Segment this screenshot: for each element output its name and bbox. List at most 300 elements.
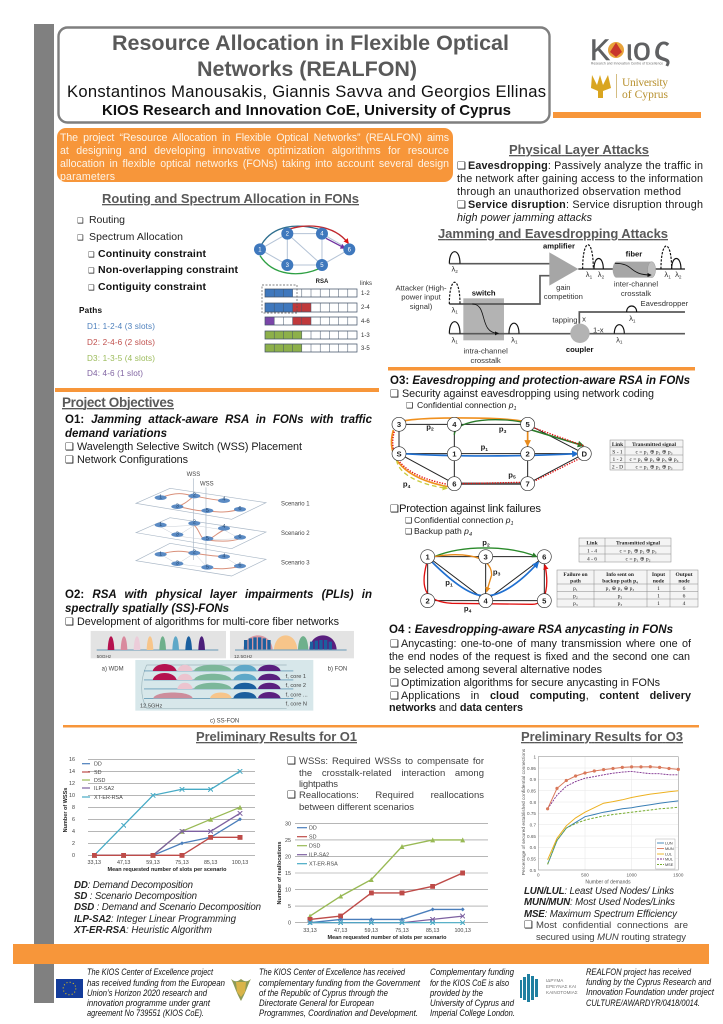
- line chart: percentage of secured connections: 0: [537, 872, 540, 878]
- diagram: jamming and eavesdropping: 1-x: [593, 326, 604, 335]
- legend text: O1 algorithms: [73, 880, 261, 936]
- orange rule: left column top: [55, 388, 379, 392]
- footer text: Government funding: of the Republic of Cyprus through the: [259, 988, 388, 998]
- text: WSS and reallocations: ❑: [287, 756, 296, 767]
- list: routing and spectrum constraints: Contiguity constraint: [98, 281, 206, 293]
- footer text: University funding: Imperial College London.: [430, 1008, 515, 1018]
- slot grid: RSA allocation: 1-3: [361, 333, 370, 339]
- intro callout: The project “Resource Allocation in Flexible Optical Networks” (REALFON) aims: [60, 132, 449, 144]
- diagram: WDM FON SS-FON spectra: 50GHz: [97, 654, 112, 659]
- footer text: University funding: Complementary funding: [430, 967, 514, 977]
- protection text: 4: [469, 532, 472, 538]
- protection text: [390, 503, 541, 538]
- line chart: number of reallocations: 30: [285, 821, 291, 827]
- logo: KOIOS: ι: [626, 34, 633, 67]
- logo: Research and Innovation Foundation: ΙΔΡΥΜΑ: [546, 978, 564, 983]
- line chart: number of reallocations: 85,13: [426, 928, 439, 934]
- diagram: WSS scenarios: 2: [193, 520, 196, 526]
- line chart: percentage of secured connections: 0.95: [527, 766, 536, 771]
- footer text: Government funding: complementary funding from the Government: [259, 978, 421, 988]
- table: failures on paths: 4: [683, 601, 686, 607]
- diagram: WSS scenarios: 5: [206, 536, 209, 542]
- title box: Networks (REALFON): [197, 57, 417, 81]
- footer text: University funding: provided by the: [429, 988, 483, 998]
- list: routing and spectrum constraints: Continuity constraint: [98, 248, 206, 260]
- text: WSS and reallocations: lightpaths: [299, 779, 338, 790]
- diagram: WDM FON SS-FON spectra: 12.5GHz: [234, 654, 253, 659]
- footer text: REALFON funding: CULTURE/AWARDYR/0418/0014.: [586, 998, 700, 1008]
- slot grid: RSA allocation: 2-4: [361, 305, 370, 311]
- diagram: jamming and eavesdropping: 1: [668, 274, 671, 279]
- diagram: WSS scenarios: 4: [222, 496, 226, 502]
- diagram: jamming and eavesdropping: fiber: [626, 250, 642, 259]
- line chart: number of reallocations: 25: [285, 838, 291, 844]
- diagram: WSS scenarios: 4: [222, 524, 226, 530]
- table: failures on paths: 6: [683, 594, 686, 600]
- line chart: percentage of secured connections: 0.5: [530, 868, 536, 873]
- diagram: jamming and eavesdropping: λ: [675, 270, 679, 279]
- table: transmitted signal on links: c = p₁ ⊕ p₂ ⊕ p₃: [635, 450, 673, 456]
- objective O3 text: ❑: [390, 389, 399, 400]
- grey side bar: [34, 24, 54, 1003]
- line chart: percentage of secured connections: MUL: [665, 858, 673, 862]
- list: paths: D4: 4-6 (1 slot): [87, 369, 143, 378]
- diagram: jamming and eavesdropping: 2: [679, 274, 682, 279]
- objective O3 text: ❑: [406, 401, 413, 410]
- table: failures on paths: node: [653, 578, 665, 584]
- table: failures on paths: Failure on: [563, 572, 588, 578]
- text: physical layer attacks: ❑: [457, 200, 466, 211]
- text: WSS and reallocations: WSSs: Required WSSs to compensate for: [299, 756, 484, 767]
- protection text: 1: [511, 521, 514, 527]
- diagram: jamming and eavesdropping: λ: [598, 270, 602, 279]
- legend text: O3 strategies: MSE: Maximum Spectrum Efficiency: [524, 909, 678, 920]
- line chart: percentage of secured connections: LUN: [665, 842, 673, 846]
- list: routing and spectrum constraints: ❑: [88, 250, 95, 259]
- heading: physical layer attacks: Physical Layer Attacks: [509, 142, 649, 157]
- objective O4 text: Applications in cloud computing, content delivery: [401, 690, 691, 702]
- line chart: percentage of secured connections: 0.75: [527, 811, 536, 816]
- diagram: WSS scenarios: 3: [176, 503, 179, 509]
- line chart: percentage of secured connections: LUL: [665, 852, 672, 856]
- logo: University of Cyprus: [591, 74, 669, 101]
- network graph: network coding: p: [499, 425, 504, 434]
- protection text: Confidential connection p: [414, 515, 511, 525]
- line chart: number of reallocations: 10: [285, 888, 291, 894]
- footer text: Government funding: Programmes, Coordination and Development.: [259, 1008, 418, 1018]
- line chart: number of WSSs: ILP-SA2: [94, 786, 114, 792]
- orange rule: right column top: [388, 367, 695, 370]
- slot grid: RSA allocation: 1-2: [361, 291, 370, 297]
- network graph: RSA example: 6: [348, 247, 352, 253]
- table: failures on paths: 6: [683, 586, 686, 592]
- objective O3 text: [390, 375, 690, 412]
- diagram: WDM FON SS-FON spectra: [91, 631, 354, 724]
- logo: Research and Innovation Foundation: ΚΑΙΝΟΤΟΜΙΑΣ: [546, 990, 578, 995]
- line chart: number of WSSs: 14: [69, 769, 75, 775]
- footer text: Government funding: [259, 967, 421, 1018]
- objective O2 text: ❑: [65, 617, 74, 628]
- objective O1 text: Network Configurations: [77, 454, 189, 466]
- objective O2 text: Development of algorithms for multi-core fiber networks: [77, 616, 340, 628]
- line chart: number of reallocations: 75,13: [395, 928, 409, 934]
- intro callout: parameters: [60, 171, 115, 183]
- diagram: WSS scenarios: WSS: [200, 481, 214, 487]
- objective O4 text: the end nodes of the request is fixed and the second one can: [389, 651, 690, 663]
- logo: KOIOS: Κ: [590, 34, 610, 67]
- orange footer band: [13, 944, 709, 964]
- line chart: number of reallocations: DD: [309, 826, 317, 832]
- network graph: protection: [421, 538, 551, 614]
- legend text: O1 algorithms: DD: Demand Decomposition: [74, 880, 193, 891]
- line chart: number of WSSs: 8: [72, 805, 75, 811]
- network graph: protection: p: [493, 567, 498, 576]
- diagram: WDM FON SS-FON spectra: b) FON: [328, 666, 347, 672]
- list: routing and spectrum constraints: ❑: [77, 233, 84, 242]
- network graph: network coding: 6: [452, 479, 456, 488]
- diagram: WDM FON SS-FON spectra: 12.5GHz: [140, 703, 162, 709]
- diagram: WSS scenarios: 6: [238, 534, 242, 540]
- slot grid: RSA allocation: 3-5: [361, 346, 370, 352]
- line chart: number of WSSs: XT-ER-RSA: [94, 795, 123, 801]
- line chart: number of WSSs: 10: [69, 793, 75, 799]
- diagram: jamming and eavesdropping: λ: [664, 270, 668, 279]
- line chart: number of reallocations: 0: [288, 921, 291, 927]
- line chart: number of WSSs: 2: [72, 841, 75, 847]
- objective O3 text: O3: Eavesdropping and protection-aware RSA in FONs: [390, 375, 690, 387]
- line chart: number of reallocations: Mean requested number of slots per scenario: [328, 935, 447, 941]
- objective O4 text: networks and data centers: [389, 702, 523, 714]
- line chart: number of WSSs: 100,13: [232, 860, 248, 866]
- line chart: number of WSSs: 47,13: [117, 860, 130, 866]
- text: physical layer attacks: Service disruption: Service disruption through: [468, 199, 703, 211]
- table: link signal for protection: c = p₁ ⊕ p₂ ⊕ p₃: [619, 548, 657, 554]
- table: link signal for protection: [579, 538, 671, 562]
- footer text: EU funding: innovation programme under grant: [87, 998, 211, 1008]
- text: WSS and reallocations: Reallocations: Required reallocations: [299, 790, 484, 801]
- line chart: number of reallocations: XT-ER-RSA: [309, 862, 338, 868]
- table: failures on paths: backup path p₄: [602, 578, 638, 584]
- footer text: Government funding: Directorate General for European: [259, 998, 374, 1008]
- diagram: jamming and eavesdropping: λ: [451, 335, 455, 344]
- objective O1 text: O1: Jamming attack-aware RSA in FONs with traffic: [65, 414, 373, 426]
- line chart: percentage of secured connections: 500: [581, 872, 589, 878]
- network graph: protection: 2: [487, 542, 490, 548]
- network graph: RSA example: 4: [320, 232, 324, 238]
- objective O2 text: spectrally spatially (SS)-FONs: [65, 603, 229, 615]
- line chart: number of WSSs: 33,13: [88, 860, 101, 866]
- diagram: WSS scenarios: 3: [176, 560, 179, 566]
- icon: Cyprus emblem: [231, 979, 251, 1001]
- objective O3 text: 1: [514, 406, 517, 412]
- objective O4 text: ❑: [390, 691, 399, 702]
- list: paths: D3: 1-3-5 (4 slots): [87, 354, 155, 363]
- table: transmitted signal on links: c = p₁ ⊕ p₂ ⊕ p₃: [635, 464, 673, 470]
- heading: jamming and eavesdropping attacks: Jamming and Eavesdropping Attacks: [438, 226, 668, 241]
- diagram: jamming and eavesdropping: λ: [616, 335, 620, 344]
- legend text: O1 algorithms: DSD : Demand and Scenario Decomposition: [74, 902, 261, 913]
- text: MUN conclusion: ❑: [524, 920, 533, 931]
- text: MUN conclusion: [524, 920, 688, 943]
- list: routing and spectrum constraints: ❑: [77, 216, 84, 225]
- line chart: number of reallocations: 100,13: [454, 928, 471, 934]
- table: failures on paths: Info sent on: [606, 572, 634, 578]
- list: routing and spectrum constraints: ❑: [88, 266, 95, 275]
- line chart: percentage of secured connections: 0.65: [527, 834, 536, 839]
- icon: EU flag: [56, 979, 83, 998]
- legend text: O3 strategies: MUN/MUN: Most Used Nodes/Links: [524, 897, 675, 908]
- diagram: jamming and eavesdropping: power input: [401, 293, 442, 302]
- list: routing and spectrum constraints: Non-overlapping constraint: [98, 264, 238, 276]
- network graph: protection: 6: [542, 552, 546, 561]
- text: MUN conclusion: Most confidential connections are: [536, 920, 688, 931]
- line chart: number of reallocations: Number of reallocations: [277, 842, 283, 904]
- table: transmitted signal on links: c = p₁ ⊕ p₂ ⊕ p₃ ⊕ p₄: [629, 457, 679, 463]
- diagram: jamming and eavesdropping: λ: [511, 335, 515, 344]
- network graph: protection: 5: [542, 596, 547, 605]
- objective O4 text: O4 : Eavesdropping-aware RSA anycasting in FONs: [389, 624, 673, 636]
- line chart: number of WSSs: 4: [72, 829, 75, 835]
- diagram: jamming and eavesdropping: crosstalk: [621, 289, 651, 298]
- diagram: WSS scenarios: 2: [193, 492, 196, 498]
- line chart: number of WSSs: DD: [94, 762, 102, 768]
- network graph: RSA example: 5: [320, 263, 324, 269]
- diagram: jamming and eavesdropping: λ: [451, 305, 455, 314]
- intro callout: allocation in flexible optical networks (FONs) taking into account several design: [60, 158, 449, 170]
- line chart: number of WSSs: 0: [72, 853, 75, 859]
- diagram: jamming and eavesdropping: crosstalk: [471, 356, 501, 365]
- network graph: protection: 4: [484, 596, 489, 605]
- table: transmitted signal on links: [610, 440, 683, 470]
- list: routing and spectrum constraints: ❑: [88, 283, 95, 292]
- text: physical layer attacks: ❑: [457, 161, 466, 172]
- objective O4 text: Optimization algorithms for secure anycasting in FONs: [401, 677, 661, 689]
- table: failures on paths: Output: [675, 572, 693, 578]
- network graph: network coding: D: [582, 449, 588, 458]
- heading: preliminary results O3: Preliminary Results for O3: [521, 729, 683, 744]
- line chart: percentage of secured connections: 0.55: [527, 856, 536, 862]
- diagram: jamming and eavesdropping: λ: [629, 314, 633, 323]
- objective O3 text: Security against eavesdropping using network coding: [402, 388, 654, 400]
- diagram: WSS scenarios: 6: [238, 563, 242, 569]
- logo: Research and Innovation Foundation: ΕΡΕΥΝΑΣ ΚΑΙ: [546, 984, 576, 989]
- objective O1 text: ❑: [65, 442, 74, 453]
- objective O4 text: ❑: [390, 639, 399, 650]
- text: WSS and reallocations: between different scenarios: [299, 802, 414, 813]
- footer text: University funding: University of Cyprus and: [430, 998, 515, 1008]
- network graph: protection: p: [464, 604, 469, 613]
- footer text: EU funding: [87, 967, 225, 1018]
- line chart: number of WSSs: SD: [94, 770, 102, 776]
- title box: KIOS Research and Innovation CoE, University of Cyprus: [102, 102, 511, 119]
- logo: KOIOS: ο: [633, 31, 651, 67]
- diagram: WSS scenarios: 6: [238, 506, 242, 512]
- line chart: number of reallocations: 15: [285, 871, 291, 877]
- protection text: ❑: [405, 516, 412, 525]
- line chart: number of WSSs: 6: [72, 817, 75, 823]
- heading: project objectives: Project Objectives: [62, 395, 174, 410]
- line chart: number of reallocations: 47,13: [334, 928, 347, 934]
- diagram: WSS scenarios: 5: [206, 508, 209, 514]
- diagram: WDM FON SS-FON spectra: c) SS-FON: [210, 718, 239, 724]
- protection text: Backup path p: [414, 526, 469, 536]
- table: failures on paths: p₃: [618, 601, 622, 607]
- line chart: number of reallocations: 5: [288, 904, 291, 910]
- line chart: number of WSSs: 16: [69, 757, 75, 763]
- footer text: EU funding: The KIOS Center of Excellence project: [87, 967, 213, 977]
- protection text: ❑: [390, 504, 399, 515]
- diagram: jamming and eavesdropping: λ: [451, 265, 455, 274]
- text: physical layer attacks: high power jamming attacks: [457, 212, 593, 224]
- line chart: percentage of secured connections: MSE: [665, 863, 674, 867]
- diagram: jamming and eavesdropping: λ: [586, 270, 590, 279]
- diagram: WSS scenarios: 1: [159, 495, 162, 501]
- objective O4 text: [389, 624, 692, 714]
- table: link signal for protection: Transmitted signal: [616, 540, 660, 546]
- diagram: WSS scenarios: Scenario 3: [281, 561, 310, 567]
- orange rule below logos: [553, 112, 701, 118]
- protection text: Protection against link failures: [399, 503, 541, 515]
- network graph: network coding: 1: [485, 447, 488, 453]
- diagram: jamming and eavesdropping: intra-channel: [464, 346, 508, 355]
- logo: Research and Innovation Foundation: [520, 974, 578, 1002]
- network graph: protection: 1: [450, 582, 453, 588]
- network graph: network coding: 3: [397, 420, 401, 429]
- heading: routing and spectrum allocation: Routing and Spectrum Allocation in FONs: [102, 191, 359, 206]
- network graph: protection: 1: [426, 552, 431, 561]
- diagram: jamming and eavesdropping: 1: [455, 310, 458, 315]
- diagram: WDM FON SS-FON spectra: f, core 2: [286, 683, 306, 689]
- network graph: network coding: p: [508, 470, 513, 479]
- network graph: protection: 2: [426, 596, 430, 605]
- objective O2 text: [65, 589, 372, 628]
- text: WSS and reallocations: ❑: [287, 790, 296, 801]
- text: physical layer attacks: [457, 160, 703, 224]
- list: routing and spectrum constraints: Spectrum Allocation: [89, 231, 183, 243]
- network graph: network coding: 1: [452, 449, 457, 458]
- diagram: jamming and eavesdropping: Eavesdropper: [640, 299, 689, 308]
- line chart: percentage of secured connections: Percentage of secured established confidential connections: [521, 748, 527, 875]
- diagram: jamming and eavesdropping: 1: [515, 340, 518, 345]
- table: failures on paths: path: [570, 578, 581, 584]
- objective O4 text: ❑: [390, 678, 399, 689]
- line chart: percentage of secured connections: [521, 748, 684, 886]
- list: paths: D1: 1-2-4 (3 slots): [87, 322, 155, 331]
- network graph: network coding: 2: [431, 427, 434, 433]
- line chart: number of WSSs: 85,13: [204, 860, 217, 866]
- line chart: percentage of secured connections: 0.7: [530, 822, 536, 828]
- table: link signal for protection: 1 - 4: [587, 548, 597, 554]
- line chart: percentage of secured connections: 1: [533, 754, 536, 760]
- network graph: RSA example: 3: [286, 263, 290, 269]
- logo: University of Cyprus: of Cyprus: [622, 89, 669, 101]
- footer text: University funding: for the KIOS CoE is also: [430, 978, 509, 988]
- footer text: EU funding: has received funding from the European: [87, 978, 225, 988]
- table: failures on paths: p₁ ⊕ p₂ ⊕ p₃: [606, 586, 634, 592]
- table: failures on paths: Input: [652, 572, 665, 578]
- table: failures on paths: [557, 570, 698, 607]
- network graph: network coding: 7: [526, 479, 530, 488]
- diagram: jamming and eavesdropping: [395, 242, 689, 365]
- table: link signal for protection: Link: [586, 540, 599, 546]
- diagram: jamming and eavesdropping: x: [582, 315, 586, 324]
- line chart: number of WSSs: 59,13: [146, 860, 160, 866]
- list: paths: Paths: [79, 306, 102, 315]
- line chart: percentage of secured connections: 0.9: [530, 777, 536, 782]
- table: failures on paths: p₁: [573, 586, 578, 592]
- table: transmitted signal on links: S - 1: [612, 450, 623, 456]
- objective O4 text: Anycasting: one-to-one of many transmission where one of: [401, 638, 692, 650]
- network graph: network coding: p: [403, 480, 408, 489]
- title box: Resource Allocation in Flexible Optical: [112, 31, 509, 55]
- diagram: WDM FON SS-FON spectra: f, core N: [286, 701, 307, 707]
- table: link signal for protection: c = p₁ ⊕ p₂: [626, 556, 651, 562]
- diagram: jamming and eavesdropping: 1: [620, 340, 623, 345]
- table: link signal for protection: 4 - 6: [587, 556, 597, 562]
- footer text: EU funding: agreement No 739551 (KIOS CoE).: [87, 1008, 204, 1018]
- protection text: ❑: [405, 527, 412, 536]
- line chart: percentage of secured connections: 0.85: [527, 788, 536, 794]
- diagram: WSS scenarios: WSS: [187, 472, 200, 478]
- objective O1 text: demand variations: [65, 428, 167, 440]
- line chart: percentage of secured connections: 0.8: [530, 800, 536, 805]
- objective O1 text: ❑: [65, 455, 74, 466]
- diagram: jamming and eavesdropping: gain: [556, 283, 571, 292]
- line chart: number of reallocations: 20: [285, 854, 291, 860]
- line chart: number of WSSs: DSD: [94, 778, 105, 784]
- network graph: protection: 4: [469, 608, 472, 614]
- diagram: jamming and eavesdropping: competition: [544, 292, 583, 301]
- diagram: WDM FON SS-FON spectra: f, core 1: [286, 674, 306, 680]
- network graph: RSA example: [254, 226, 355, 274]
- table: transmitted signal on links: 1 - 2: [612, 457, 623, 463]
- network graph: network coding: 5: [526, 420, 531, 429]
- network graph: protection: 3: [498, 572, 501, 578]
- diagram: WSS scenarios: 5: [206, 565, 209, 571]
- text: physical layer attacks: through an unauthorized observation method: [457, 186, 681, 198]
- list: paths: D2: 2-4-6 (2 slots): [87, 338, 155, 347]
- footer text: EU funding: Union’s Horizon 2020 research and: [87, 988, 208, 998]
- list: routing and spectrum constraints: [77, 214, 238, 293]
- footer text: REALFON funding: Innovation Foundation under project: [586, 987, 714, 997]
- logo: University of Cyprus: University: [622, 77, 668, 89]
- diagram: WSS scenarios: 2: [193, 549, 196, 555]
- diagram: jamming and eavesdropping: inter-channel: [614, 280, 658, 289]
- diagram: jamming and eavesdropping: 1: [633, 318, 636, 323]
- diagram: jamming and eavesdropping: switch: [472, 288, 496, 297]
- line chart: number of reallocations: SD: [309, 835, 317, 841]
- line chart: number of reallocations: 33,13: [303, 928, 317, 934]
- legend text: O1 algorithms: SD : Scenario Decomposition: [74, 891, 197, 902]
- diagram: WSS scenarios: [136, 472, 310, 576]
- network graph: protection: p: [445, 578, 450, 587]
- table: failures on paths: p₃: [573, 601, 578, 607]
- table: transmitted signal on links: Transmitted signal: [632, 442, 676, 448]
- network graph: network coding: S: [396, 449, 402, 458]
- network graph: protection: p: [482, 538, 487, 547]
- network graph: network coding: p: [426, 422, 431, 431]
- line chart: number of reallocations: DSD: [309, 844, 320, 850]
- text: WSS and reallocations: [287, 756, 484, 813]
- intro callout: at designing and developing innovative optimization algorithms for resource: [60, 145, 449, 157]
- table: failures on paths: p₂: [573, 594, 578, 600]
- heading: preliminary results O1: Preliminary Results for O1: [196, 729, 357, 744]
- line chart: number of WSSs: Number of WSSs: [63, 788, 69, 832]
- diagram: WSS scenarios: 1: [159, 522, 162, 528]
- footer text: University funding: [429, 967, 515, 1018]
- network graph: network coding: 4: [408, 484, 411, 490]
- line chart: percentage of secured connections: 1500: [673, 872, 684, 878]
